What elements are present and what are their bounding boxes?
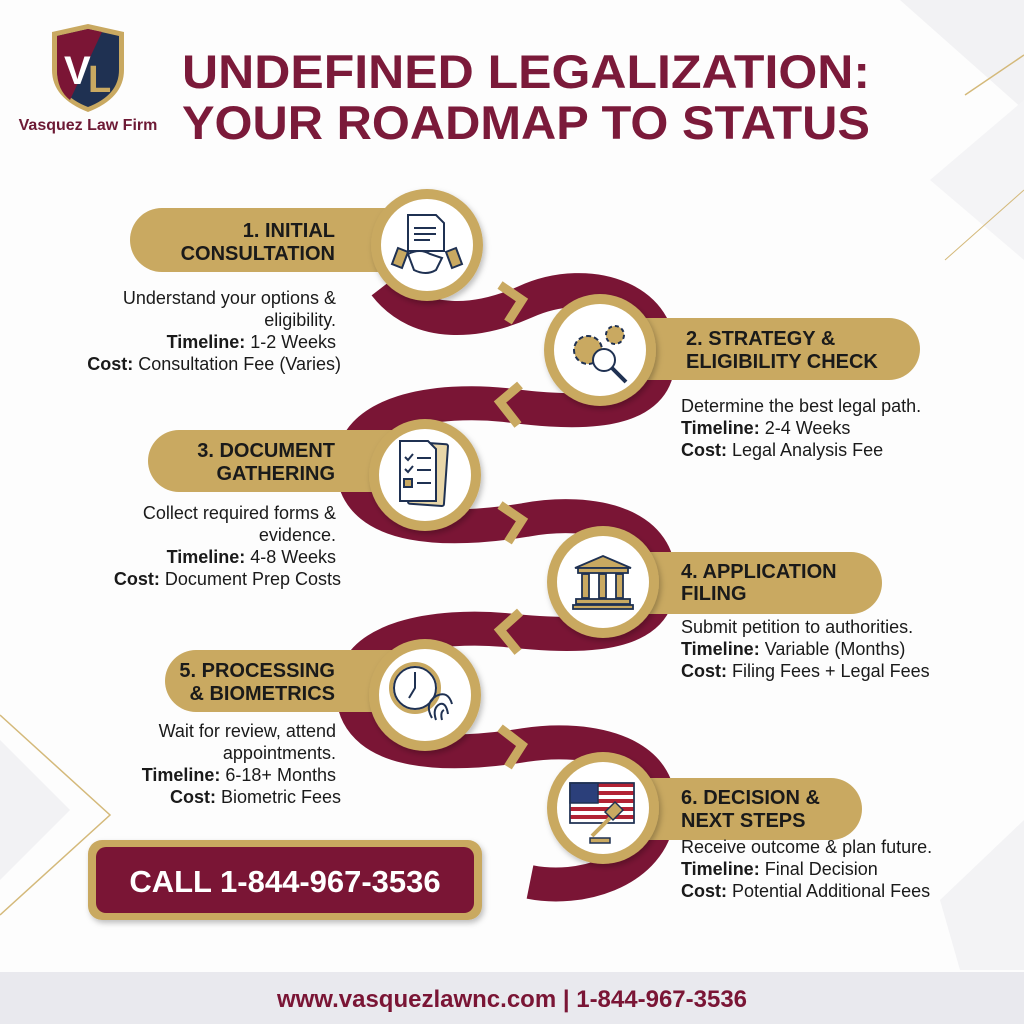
step 2: Timeline: 2-4 Weeks	[681, 418, 850, 438]
step 5: appointments.	[223, 743, 336, 763]
call to action button	[88, 840, 482, 920]
step 2	[544, 294, 926, 460]
icon: checklist	[400, 441, 448, 506]
logo: Vasquez Law Firm	[19, 117, 157, 134]
step 5: 5. PROCESSING	[179, 660, 335, 682]
step 4: 4. APPLICATION	[681, 561, 837, 583]
step 3: Cost: Document Prep Costs	[114, 569, 341, 589]
step 6: Receive outcome & plan future.	[681, 837, 932, 857]
step 3: Collect required forms &	[143, 503, 336, 523]
step 4: Submit petition to authorities.	[681, 617, 913, 637]
step 3: evidence.	[259, 525, 336, 545]
step 1: Understand your options &	[123, 288, 336, 308]
step 5: & BIOMETRICS	[189, 683, 335, 705]
step 1	[87, 189, 483, 374]
icon: gears magnifier	[574, 326, 626, 382]
footer	[0, 972, 1024, 1024]
call to action button: CALL 1-844-967-3536	[129, 864, 441, 899]
title: YOUR ROADMAP TO STATUS	[182, 96, 870, 149]
step 5: Timeline: 6-18+ Months	[142, 765, 336, 785]
step 2: Determine the best legal path.	[681, 396, 921, 416]
step 2: ELIGIBILITY CHECK	[686, 351, 878, 373]
icon: handshake document	[392, 215, 462, 273]
step 1: Timeline: 1-2 Weeks	[167, 332, 336, 352]
footer: www.vasquezlawnc.com | 1-844-967-3536	[276, 986, 747, 1013]
step 1: Cost: Consultation Fee (Varies)	[87, 354, 341, 374]
logo	[19, 24, 157, 134]
step 4: Cost: Filing Fees + Legal Fees	[681, 661, 930, 681]
step 4: FILING	[681, 583, 747, 605]
title: UNDEFINED LEGALIZATION:	[182, 45, 870, 98]
title	[182, 45, 870, 149]
icon: flag gavel	[570, 783, 634, 843]
logo: L	[88, 59, 111, 101]
step 6	[547, 752, 937, 901]
step 2: 2. STRATEGY &	[686, 328, 835, 350]
step 5: Cost: Biometric Fees	[170, 787, 341, 807]
step 1: 1. INITIAL	[243, 220, 335, 242]
logo: V	[64, 49, 91, 93]
step 6: 6. DECISION &	[681, 787, 820, 809]
step 3	[114, 419, 481, 589]
step 3: 3. DOCUMENT	[197, 440, 335, 462]
step 3: Timeline: 4-8 Weeks	[167, 547, 336, 567]
icon: clock fingerprint	[391, 664, 452, 720]
step 3: GATHERING	[216, 463, 335, 485]
step 5: Wait for review, attend	[159, 721, 336, 741]
step 5	[142, 639, 481, 807]
arrows	[500, 285, 522, 767]
step 4: Timeline: Variable (Months)	[681, 639, 905, 659]
step 2: Cost: Legal Analysis Fee	[681, 440, 883, 460]
ribbon path	[353, 285, 659, 884]
icon: courthouse	[573, 556, 633, 609]
step 1: CONSULTATION	[181, 243, 335, 265]
step 6: NEXT STEPS	[681, 810, 805, 832]
step 6: Cost: Potential Additional Fees	[681, 881, 930, 901]
step 4	[547, 526, 930, 681]
step 6: Timeline: Final Decision	[681, 859, 878, 879]
step 1: eligibility.	[264, 310, 336, 330]
